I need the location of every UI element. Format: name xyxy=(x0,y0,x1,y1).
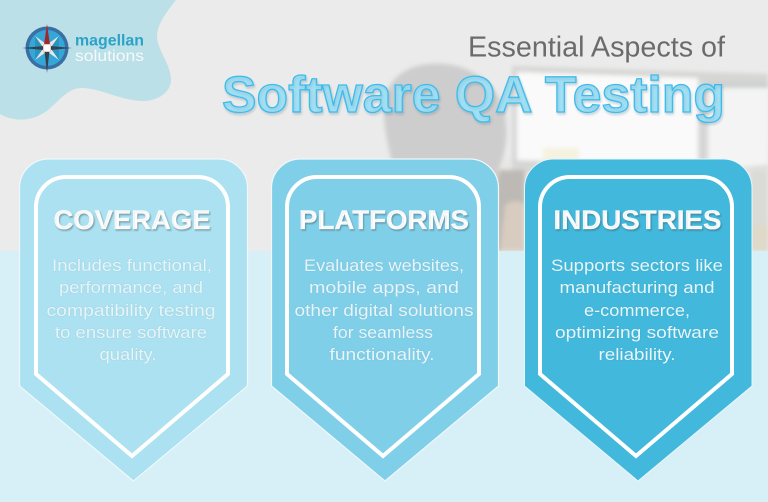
industries text xyxy=(551,256,723,364)
platforms heading: PLATFORMS xyxy=(299,205,469,235)
platforms text: for seamless xyxy=(333,323,433,342)
coverage text: compatibility testing xyxy=(46,301,216,320)
logo blob xyxy=(0,0,176,120)
coverage text: performance, and xyxy=(59,278,203,297)
platforms text: Evaluates websites, xyxy=(304,256,464,275)
coverage shield xyxy=(20,159,248,481)
logo: Magellan Solutions: solutions xyxy=(75,48,144,65)
industries inner outline xyxy=(540,177,732,456)
platforms inner outline xyxy=(287,177,479,456)
coverage text: to ensure software xyxy=(55,323,207,342)
industries text: Supports sectors like xyxy=(551,256,723,275)
logo wordmark: magellan xyxy=(75,32,144,50)
industries text: reliability. xyxy=(598,345,676,364)
background: faded photo of tester at monitors xyxy=(0,0,768,251)
industries text: manufacturing and xyxy=(560,278,714,297)
industries text: optimizing software xyxy=(555,323,719,342)
coverage text: quality. xyxy=(100,345,156,364)
panel: coverage xyxy=(20,159,248,481)
platforms shield xyxy=(272,159,499,481)
industries heading: INDUSTRIES xyxy=(554,205,722,235)
platforms text: other digital solutions xyxy=(294,301,474,320)
panel: industries xyxy=(524,159,752,481)
subtitle: Essential Aspects of xyxy=(468,32,726,64)
industries text: e-commerce, xyxy=(584,301,690,320)
platforms text xyxy=(294,256,474,364)
coverage heading: COVERAGE xyxy=(54,205,210,235)
panel: platforms xyxy=(272,159,499,481)
logo: Magellan Solutions xyxy=(22,24,144,73)
platforms text: functionality. xyxy=(330,345,434,364)
coverage text: Includes functional, xyxy=(52,256,212,275)
icon: compass xyxy=(22,24,72,73)
industries shield xyxy=(524,159,752,481)
coverage text xyxy=(46,256,216,364)
platforms text: mobile apps, and xyxy=(309,278,459,297)
title: Software QA Testing xyxy=(222,66,725,123)
coverage inner outline xyxy=(36,177,228,456)
